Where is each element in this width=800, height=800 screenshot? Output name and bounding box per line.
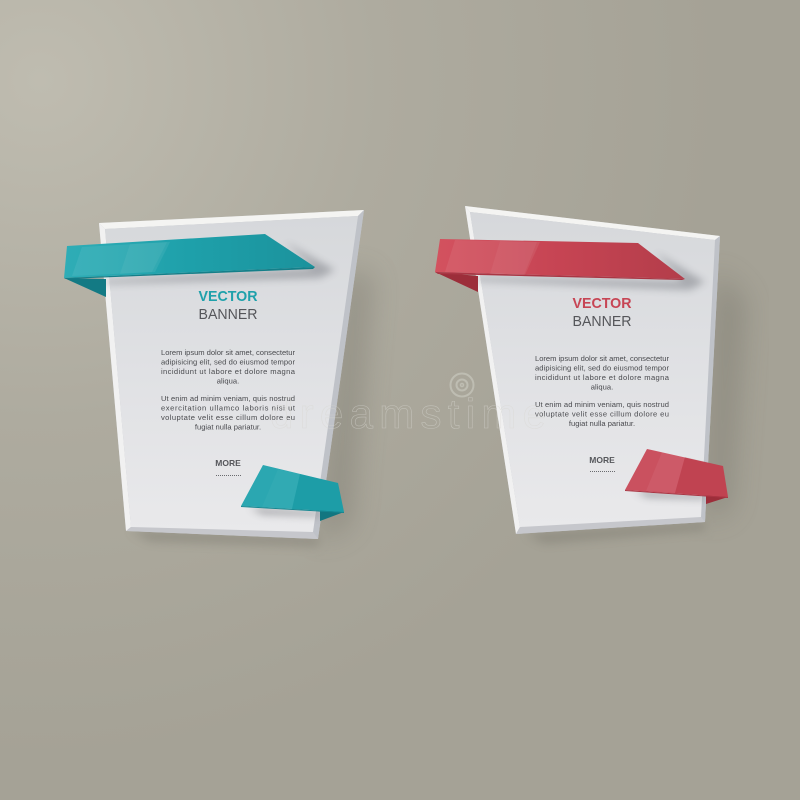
text block: teal banner: Lorem ipsum dolor sit amet, consectetur	[161, 348, 295, 357]
card shadow: red banner	[525, 270, 745, 543]
heading: red banner: VECTOR	[572, 295, 632, 312]
panel: red banner	[435, 206, 745, 543]
text block: teal banner: fugiat nulla pariatur.	[195, 422, 261, 432]
heading: teal banner: VECTOR	[198, 288, 258, 305]
text block: red banner: aliqua.	[591, 382, 613, 392]
text block: teal banner: incididunt ut labore et dolore magna	[161, 367, 296, 376]
card: red banner	[465, 206, 720, 534]
ribbon: red top	[435, 239, 685, 292]
ribbon: teal small	[241, 465, 344, 521]
text block: red banner: Ut enim ad minim veniam, quis nostrud	[535, 400, 669, 409]
text block: teal banner: exercitation ullamco laboris nisi ut	[161, 404, 296, 412]
card: teal banner	[99, 210, 364, 539]
heading: teal banner: BANNER	[198, 306, 258, 323]
ribbon: teal top	[64, 234, 315, 297]
heading: red banner	[572, 295, 632, 330]
text block: red banner: voluptate velit esse cillum dolore eu	[535, 410, 669, 418]
more link: teal banner	[215, 458, 241, 476]
text block: teal banner	[161, 348, 296, 432]
ribbon shadow: red top	[477, 252, 705, 290]
card shadow: teal banner	[130, 270, 372, 546]
more link: red banner: MORE	[589, 455, 615, 465]
text block: red banner: incididunt ut labore et dolore magna	[535, 373, 670, 382]
watermark	[270, 374, 546, 437]
text block: red banner: adipisicing elit, sed do eiusmod tempor	[535, 364, 669, 372]
text block: teal banner: adipisicing elit, sed do eiusmod tempor	[161, 358, 295, 366]
heading: teal banner	[198, 288, 258, 323]
ribbon shadow: teal top	[105, 242, 335, 284]
ribbon: red small	[625, 449, 728, 504]
ribbon shadow: red small	[635, 491, 705, 499]
more link: teal banner: MORE	[215, 458, 241, 468]
watermark wordmark: dreamstime	[270, 390, 546, 437]
text block: teal banner: Ut enim ad minim veniam, quis nostrud	[161, 394, 295, 403]
heading: red banner: BANNER	[572, 313, 632, 330]
watermark spiral	[450, 374, 474, 396]
text block: red banner: Lorem ipsum dolor sit amet, consectetur	[535, 354, 669, 363]
ribbon shadow: teal small	[250, 508, 320, 516]
text block: teal banner: voluptate velit esse cillum dolore eu	[161, 413, 295, 422]
text block: red banner: fugiat nulla pariatur.	[569, 419, 635, 428]
text block: red banner	[535, 354, 670, 428]
text block: teal banner: aliqua.	[217, 376, 239, 386]
panel: teal banner	[64, 210, 372, 546]
more link: red banner	[589, 455, 615, 472]
